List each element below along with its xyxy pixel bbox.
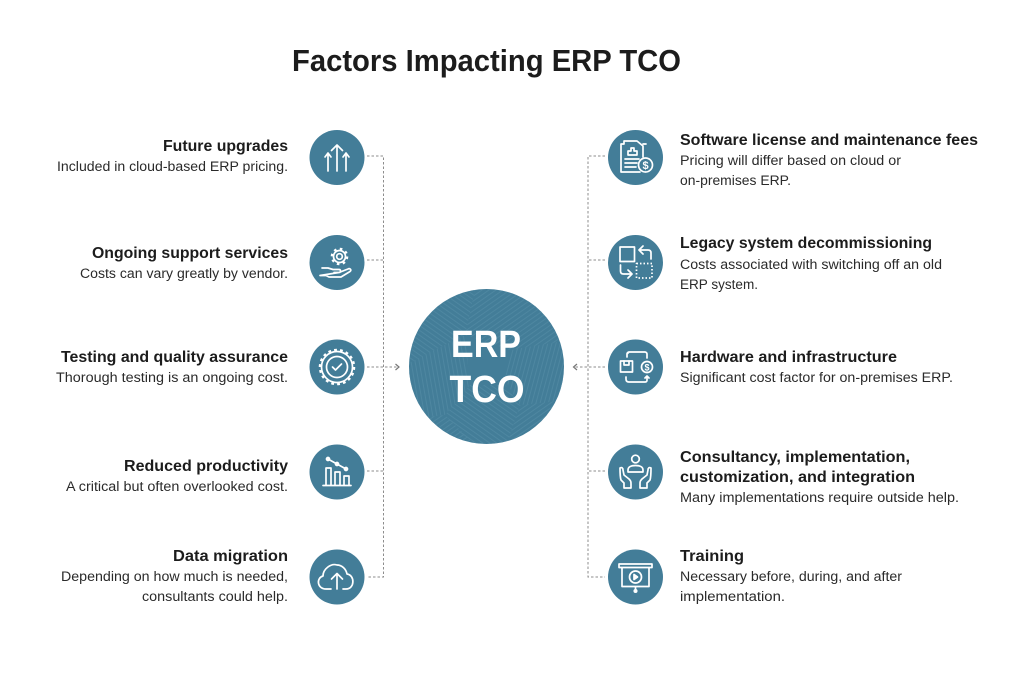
item: Legacy system decommissioning: Legacy system decommissioning <box>680 235 932 252</box>
connector: left dotted lines <box>367 156 399 577</box>
item: Ongoing support services: Costs can vary greatly by vendor. <box>80 266 288 281</box>
item: Training <box>608 548 903 604</box>
icon: presentation screen with play button <box>619 564 652 592</box>
item: Hardware and infrastructure <box>608 340 953 394</box>
item: Hardware and infrastructure: Significant cost factor for on-premises ERP. <box>680 370 953 385</box>
item: Hardware and infrastructure: Hardware and infrastructure <box>680 349 897 366</box>
item: Software license and maintenance fees <box>608 130 978 188</box>
item: Training: Training <box>680 548 744 565</box>
item: Ongoing support services: Ongoing support services <box>92 245 288 262</box>
icon: declining bar chart <box>323 458 351 486</box>
item: Future upgrades: Future upgrades <box>163 138 288 155</box>
icon: hand holding gear <box>320 249 351 277</box>
item: Software license and maintenance fees: on-premises ERP. <box>680 173 791 188</box>
central circle: ERP TCO: ERP <box>451 324 521 366</box>
icon: cloud upload <box>318 565 353 589</box>
item: Future upgrades: Included in cloud-based ERP pricing. <box>57 159 288 174</box>
item: Consultancy, implementation, customization, and integration: Consultancy, implementation, <box>680 449 910 466</box>
item: Training: Necessary before, during, and after <box>680 569 903 584</box>
item: Testing and quality assurance: Testing and quality assurance <box>61 349 288 366</box>
icon: system swap arrows <box>620 246 652 278</box>
item: Testing and quality assurance: Thorough testing is an ongoing cost. <box>56 370 288 385</box>
item: Data migration <box>61 548 364 604</box>
item: Legacy system decommissioning: Costs associated with switching off an old <box>680 257 942 272</box>
item: Reduced productivity <box>66 444 364 500</box>
item: Legacy system decommissioning: ERP system. <box>680 277 758 292</box>
item: Training: implementation. <box>680 589 785 604</box>
central circle: ERP TCO <box>405 289 570 450</box>
icon: quality badge <box>320 350 354 384</box>
icon: hands supporting person <box>620 455 651 488</box>
icon: hardware and dollar exchange: $ <box>644 362 650 372</box>
item: Testing and quality assurance <box>56 340 364 394</box>
item: Reduced productivity: A critical but often overlooked cost. <box>66 479 288 494</box>
item: Reduced productivity: Reduced productivity <box>124 458 288 475</box>
item: Software license and maintenance fees: Software license and maintenance fees <box>680 132 978 149</box>
item: Consultancy, implementation, customization, and integration <box>608 444 959 505</box>
item: Data migration: Depending on how much is needed, <box>61 569 288 584</box>
icon: report with dollar coin <box>621 141 652 172</box>
icon: upward arrows <box>325 145 349 171</box>
item: Consultancy, implementation, customization, and integration: Many implementations require outside help. <box>680 490 959 505</box>
connector: right dotted lines <box>574 156 605 577</box>
title: Factors Impacting ERP TCO <box>292 43 681 78</box>
icon: report with dollar coin: $ <box>642 160 649 172</box>
item: Data migration: consultants could help. <box>142 589 288 604</box>
item: Legacy system decommissioning <box>608 235 942 292</box>
item: Data migration: Data migration <box>173 548 288 565</box>
item: Future upgrades <box>57 130 364 185</box>
central circle: ERP TCO: TCO <box>450 369 524 411</box>
item: Ongoing support services <box>80 235 364 290</box>
icon: hardware and dollar exchange <box>620 352 652 382</box>
item: Consultancy, implementation, customization, and integration: customization, and integration <box>680 469 915 486</box>
item: Software license and maintenance fees: Pricing will differ based on cloud or <box>680 153 902 168</box>
